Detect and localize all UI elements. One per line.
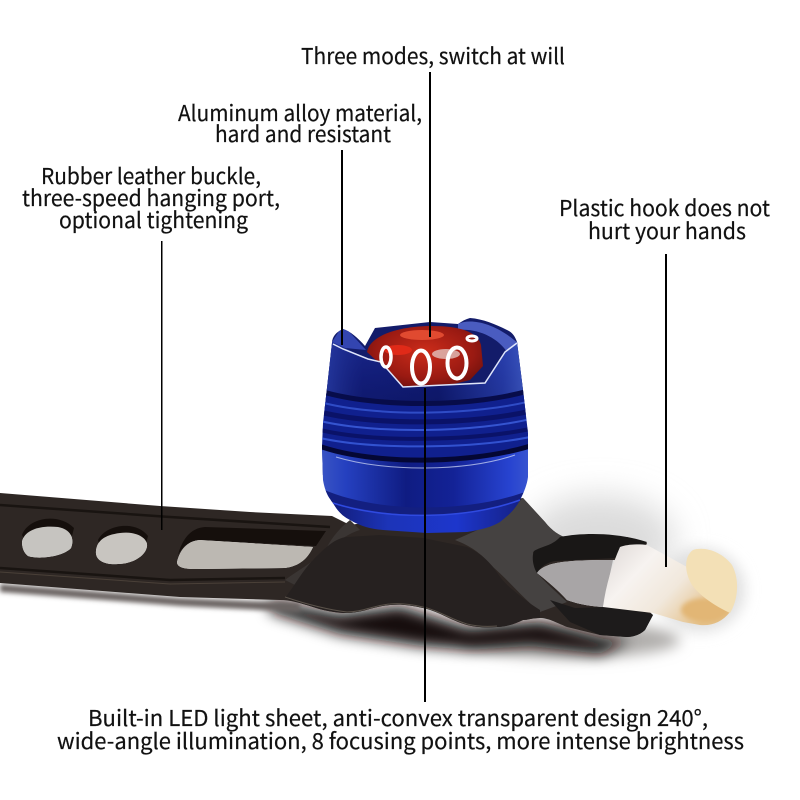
hole upper shadows: [22, 519, 326, 555]
text: plastic hook: Plastic hook does not: [559, 191, 770, 223]
text: aluminum alloy: hard and resistant: [215, 117, 391, 149]
strap band with holes: [0, 493, 653, 637]
red LED lens: [367, 326, 483, 390]
text: rubber buckle: three-speed hanging port,: [22, 181, 280, 213]
text: aluminum alloy: Aluminum alloy material,: [178, 96, 422, 128]
photo backdrop shading: [0, 495, 745, 658]
strap hole see-through areas: [22, 527, 613, 607]
text: aluminum alloy: [178, 96, 422, 149]
text: plastic hook: hurt your hands: [588, 214, 746, 246]
leader line: three modes: [429, 72, 431, 337]
leader line: rubber buckle: [161, 241, 162, 530]
machined grooves: [320, 389, 535, 475]
text: rubber buckle: optional tightening: [59, 203, 249, 235]
leader line: LED light sheet: [424, 388, 426, 702]
lower shell: [322, 449, 528, 508]
rubber strap: [0, 493, 653, 637]
text: LED light sheet: Built-in LED light sheet, anti-convex transparent design 240°,: [88, 701, 708, 733]
upper shell: [320, 340, 535, 410]
text: LED light sheet: wide-angle illumination, 8 focusing points, more intense brightness: [57, 724, 744, 756]
strap ribs: [0, 505, 330, 580]
text: rubber buckle: Rubber leather buckle,: [41, 159, 261, 191]
white plastic hook: [603, 544, 737, 625]
leader line: plastic hook: [665, 254, 667, 567]
text: LED light sheet: [57, 701, 744, 756]
rear inner wall: [326, 318, 523, 390]
LED bead rings: [381, 336, 477, 384]
dark central lobe: [285, 535, 540, 627]
grey flange: [455, 498, 567, 612]
text: three modes: Three modes, switch at will: [301, 39, 565, 71]
text: rubber buckle: [22, 159, 280, 235]
hook arms: [533, 534, 647, 573]
blue aluminium light body: [320, 315, 535, 540]
text: plastic hook: [559, 191, 770, 246]
leader line: aluminum: [341, 150, 343, 345]
